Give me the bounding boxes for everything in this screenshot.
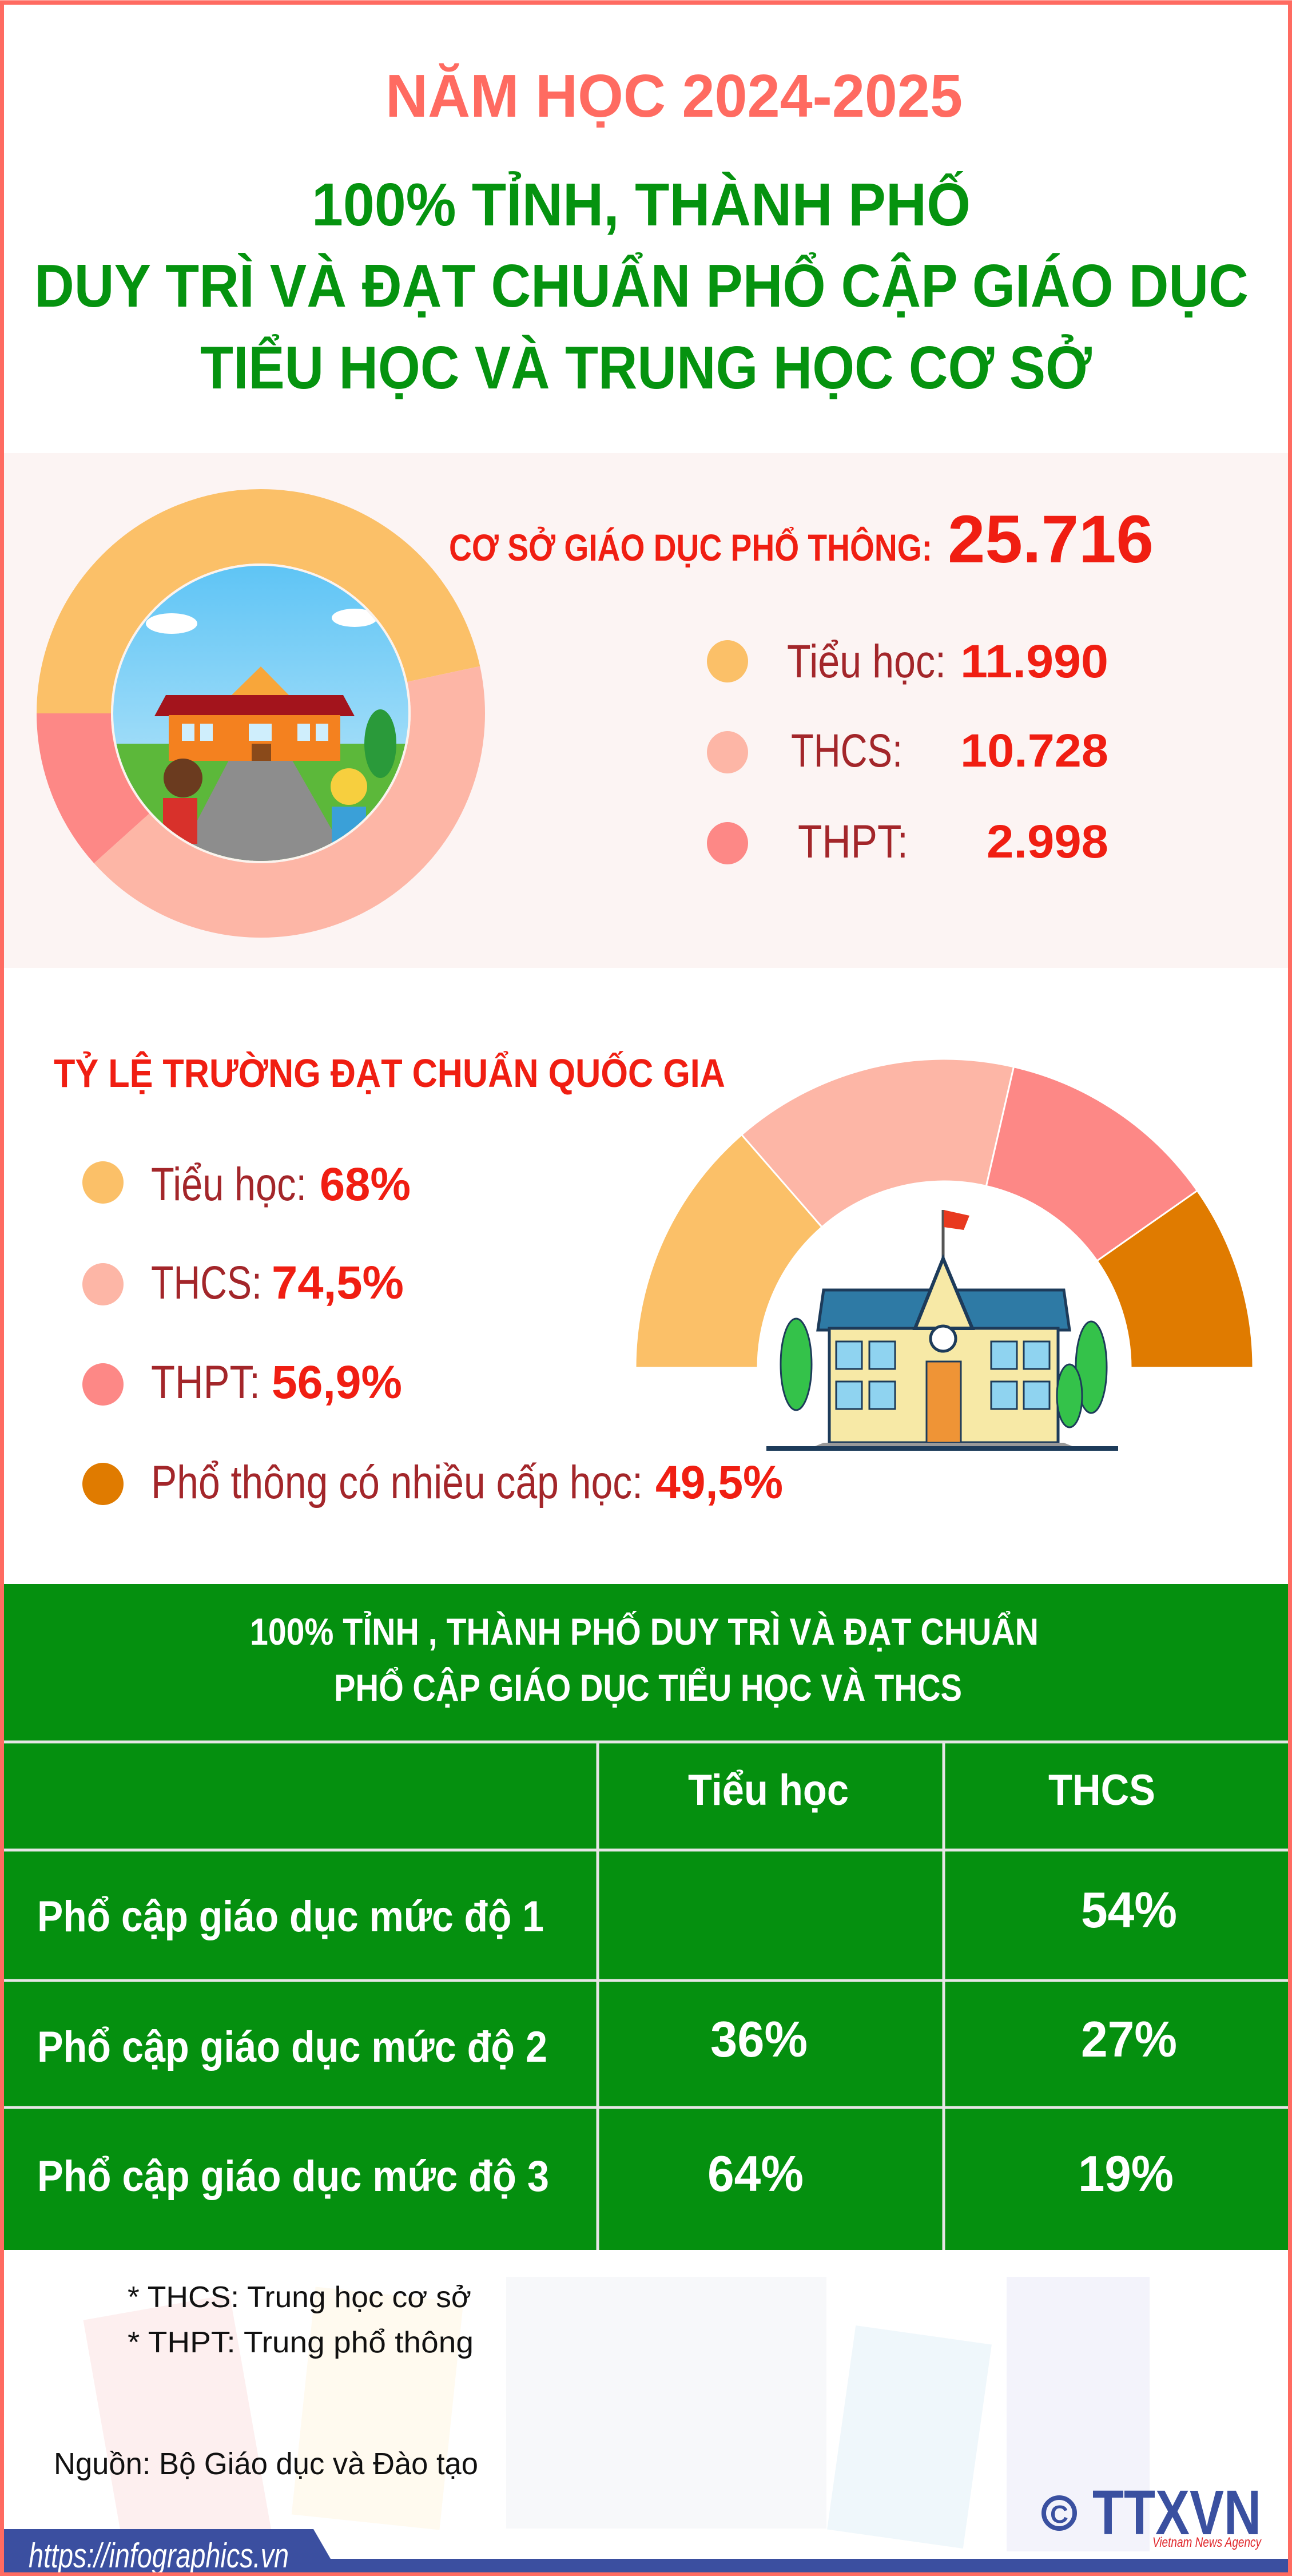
legend item: multi-level 49,5%: 49,5% [655, 1456, 783, 1509]
title: year: NĂM HỌC 2024-2025 [385, 62, 963, 130]
legend item: multi-level 49,5%: Phổ thông có nhiều cấp học: [151, 1456, 643, 1509]
table rows: 64% [707, 2145, 804, 2202]
legend item: tiểu học 68%: 68% [320, 1158, 411, 1210]
legend: THCS: 10.728 [960, 725, 1108, 777]
gauge chart [635, 1059, 1253, 1368]
legend: THPT: THPT: [798, 816, 908, 868]
logo: TTXVN [1044, 2478, 1262, 2550]
table title [250, 1610, 1039, 1709]
table rows: 36% [710, 2011, 808, 2067]
table rows: 27% [1081, 2011, 1177, 2067]
legend: tiểu học: Tiểu học: [787, 636, 946, 688]
source: Nguồn: Bộ Giáo dục và Đào tạo [54, 2447, 478, 2481]
table rows: Phổ cập giáo dục mức độ 1 [37, 1892, 544, 1941]
legend item: THCS 74,5%: 74,5% [272, 1257, 404, 1309]
icon: school scene [109, 563, 418, 875]
legend: THCS [707, 725, 1108, 777]
legend: THPT [707, 816, 1108, 868]
footer bar with url [0, 2529, 1292, 2576]
legend: tiểu học: 11.990 [960, 636, 1108, 688]
footnotes: * THPT: Trung phổ thông [128, 2326, 474, 2359]
legend item: THPT 56,9%: THPT: [151, 1356, 260, 1408]
table rows: 54% [1081, 1882, 1177, 1938]
legend: tiểu học [707, 636, 1108, 688]
table rows: Phổ cập giáo dục mức độ 3 [37, 2152, 549, 2201]
heading: total schools: CƠ SỞ GIÁO DỤC PHỔ THÔNG: [449, 526, 932, 569]
legend: THCS: THCS: [791, 725, 903, 777]
footnotes [128, 2281, 474, 2359]
main headline: TIỂU HỌC VÀ TRUNG HỌC CƠ SỞ [200, 334, 1092, 402]
table title: PHỔ CẬP GIÁO DỤC TIỂU HỌC VÀ THCS [334, 1666, 962, 1709]
logo: TTXVN: Vietnam News Agency [1152, 2535, 1262, 2550]
main headline: 100% TỈNH, THÀNH PHỐ [312, 171, 971, 239]
panel: green table [3, 1584, 1289, 2250]
panel: national standard rate [54, 1050, 1253, 1509]
heading: TỶ LỆ TRƯỜNG ĐẠT CHUẨN QUỐC GIA [54, 1050, 725, 1096]
table title: 100% TỈNH , THÀNH PHỐ DUY TRÌ VÀ ĐẠT CHUẨN [250, 1610, 1039, 1653]
legend item: THCS 74,5% [82, 1257, 404, 1309]
footnotes: * THCS: Trung học cơ sở [128, 2281, 471, 2314]
donut chart [74, 526, 448, 900]
main headline [34, 171, 1249, 402]
legend item: THCS 74,5%: THCS: [151, 1257, 262, 1309]
legend: THPT: 2.998 [987, 816, 1108, 868]
table rows [37, 1882, 1177, 2202]
legend item: THPT 56,9%: 56,9% [272, 1356, 402, 1408]
table header [688, 1766, 1155, 1815]
legend item: tiểu học 68%: Tiểu học: [151, 1158, 307, 1210]
legend item: tiểu học 68% [82, 1158, 411, 1210]
table header: Tiểu học [688, 1766, 849, 1815]
table rows: 19% [1078, 2145, 1174, 2202]
logo: TTXVN: C [1050, 2500, 1068, 2529]
footer bar with url: https://infographics.vn [29, 2537, 289, 2575]
background: faded books [84, 2277, 1150, 2557]
table rows: Phổ cập giáo dục mức độ 2 [37, 2023, 547, 2071]
panel: school count [3, 453, 1289, 968]
table header: THCS [1048, 1766, 1155, 1815]
icon: school building [766, 1210, 1118, 1451]
legend item: THPT 56,9% [82, 1356, 402, 1408]
big number 25.716: 25.716 [948, 502, 1154, 577]
